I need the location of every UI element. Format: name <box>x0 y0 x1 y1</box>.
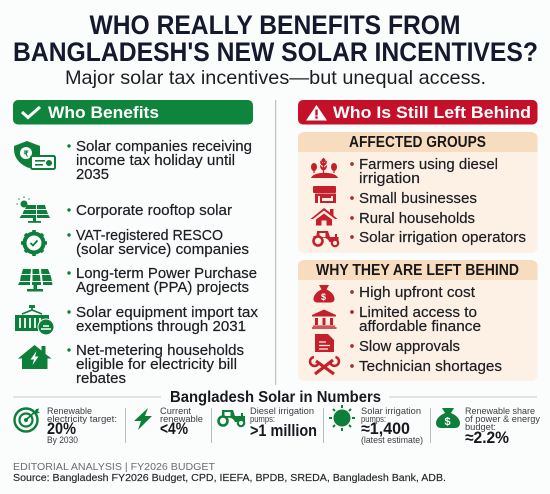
icon: document <box>315 334 334 352</box>
item: technician shortages: Technician shortages <box>359 358 502 375</box>
header: left behind: Who Is Still Left Behind <box>333 103 531 122</box>
item: limited access to finance: affordable finance <box>359 318 481 335</box>
icon: sun <box>329 405 355 431</box>
panel: who benefits <box>13 100 258 387</box>
item: tax holiday: 2035 <box>76 166 109 183</box>
footer: source: Source: Bangladesh FY2026 Budget, CPD, IEEFA, BPDB, SREDA, Bangladesh Bank, ADB. <box>13 473 446 484</box>
icon: house with bolt <box>18 345 52 369</box>
icon: tractor <box>314 231 338 246</box>
stat: diesel irrigation pumps <box>250 406 317 440</box>
item: limited access to finance: Limited access to <box>359 304 477 321</box>
item: tax holiday: Solar companies receiving <box>76 138 252 155</box>
item: high upfront cost: High upfront cost <box>359 284 476 301</box>
panel: affected groups <box>298 132 538 253</box>
stat: current renewable: renewable <box>160 414 203 425</box>
item: PPA projects <box>67 265 257 296</box>
icon: rooftop solar panel <box>16 196 50 223</box>
item: net-metering households: eligible for electricity bill <box>76 356 237 373</box>
stat: solar irrigation pumps: (latest estimate) <box>361 435 423 446</box>
item: import tax exemptions: Solar equipment import tax <box>76 304 258 321</box>
title <box>13 10 538 67</box>
icon: bank <box>312 310 336 329</box>
stat: renewable budget share: ≈2.2% <box>465 429 509 447</box>
icon: tax holiday shield and certificate <box>14 141 55 169</box>
stat: renewable target: Renewable <box>47 406 92 417</box>
header: who benefits: Who Benefits <box>48 103 159 122</box>
numbers section <box>13 389 540 447</box>
stat: solar irrigation pumps: Solar irrigation <box>361 406 421 417</box>
item: RESCO companies: (solar service) companies <box>76 241 249 258</box>
stat: current renewable <box>160 406 203 438</box>
icon: money bag: $ <box>444 416 451 428</box>
item: slow approvals: Slow approvals <box>359 338 460 355</box>
item: import tax exemptions: exemptions through 2031 <box>76 318 246 335</box>
item: corporate rooftop solar: Corporate rooftop solar <box>76 202 232 219</box>
stat: renewable target <box>47 406 117 446</box>
item: small businesses: Small businesses <box>359 190 477 207</box>
icon: money bag <box>436 408 460 428</box>
panel: why they are left behind <box>298 260 538 381</box>
icon: gear with check <box>21 230 47 256</box>
item: PPA projects: Agreement (PPA) projects <box>76 279 249 296</box>
stat: renewable target: By 2030 <box>47 435 78 446</box>
icon: tax holiday shield and certificate: ₹ <box>24 150 29 158</box>
item: farmers: irrigation <box>359 170 420 187</box>
icon: solar panel <box>18 269 52 292</box>
stat: solar irrigation pumps: ≈1,400 <box>361 420 410 438</box>
heading: why left behind: WHY THEY ARE LEFT BEHIND <box>316 262 519 279</box>
item: net-metering households: Net-metering households <box>76 342 244 359</box>
icon: wheat farm <box>311 158 338 178</box>
stat: diesel irrigation pumps: >1 million <box>250 422 317 440</box>
icon: target <box>14 408 40 432</box>
column divider <box>275 100 276 385</box>
item: solar irrigation operators: Solar irrigation operators <box>359 229 526 246</box>
stat: renewable budget share: Renewable share <box>465 406 535 417</box>
icon: house <box>310 208 338 226</box>
item: farmers: Farmers using diesel <box>359 156 498 173</box>
icon: money bag <box>314 285 334 302</box>
item: RESCO companies: VAT-registered RESCO <box>76 227 223 244</box>
footer: editorial label: EDITORIAL ANALYSIS | FY2026 BUDGET <box>13 462 215 473</box>
stat: renewable target: 20% <box>47 420 76 438</box>
icon: money bag: $ <box>321 292 326 302</box>
stat: renewable target: electricity target: <box>47 414 117 425</box>
header: who benefits <box>13 100 253 124</box>
stat: current renewable: Current <box>160 406 191 417</box>
item: farmers <box>350 156 498 187</box>
item: net-metering households: rebates <box>76 370 126 387</box>
icon: crossed wrench and screwdriver <box>310 357 339 374</box>
title: WHO REALLY BENEFITS FROM <box>90 10 460 40</box>
icon: tractor <box>218 410 245 426</box>
item: tax holiday: income tax holiday until <box>76 152 235 169</box>
panel: who is still left behind <box>298 100 538 381</box>
stat: current renewable: <4% <box>160 420 188 438</box>
stat: diesel irrigation pumps: Diesel irrigation <box>250 406 314 417</box>
item: rural households: Rural households <box>359 210 475 227</box>
header: left behind <box>298 100 538 124</box>
icon: storefront <box>313 186 336 203</box>
item: net-metering households <box>67 342 244 387</box>
item: import tax exemptions <box>67 304 258 335</box>
item: RESCO companies <box>67 227 249 258</box>
item: tax holiday <box>67 138 252 183</box>
stat: renewable budget share: budget: <box>465 422 496 433</box>
heading: bangladesh solar in numbers: Bangladesh Solar in Numbers <box>170 389 381 406</box>
item: limited access to finance <box>350 304 481 335</box>
icon: container with crane hook <box>15 305 54 335</box>
stat: solar irrigation pumps: pumps: <box>361 414 386 425</box>
stat: diesel irrigation pumps: pumps: <box>250 414 275 425</box>
stat: renewable budget share <box>465 406 540 447</box>
stat: solar irrigation pumps <box>361 406 423 446</box>
heading: affected groups: AFFECTED GROUPS <box>349 134 486 151</box>
icon: lightning bolt <box>134 408 152 430</box>
subtitle: Major solar tax incentives—but unequal access. <box>65 67 486 89</box>
item: PPA projects: Long-term Power Purchase <box>76 265 257 282</box>
stat: renewable budget share: of power & energy <box>465 414 540 425</box>
